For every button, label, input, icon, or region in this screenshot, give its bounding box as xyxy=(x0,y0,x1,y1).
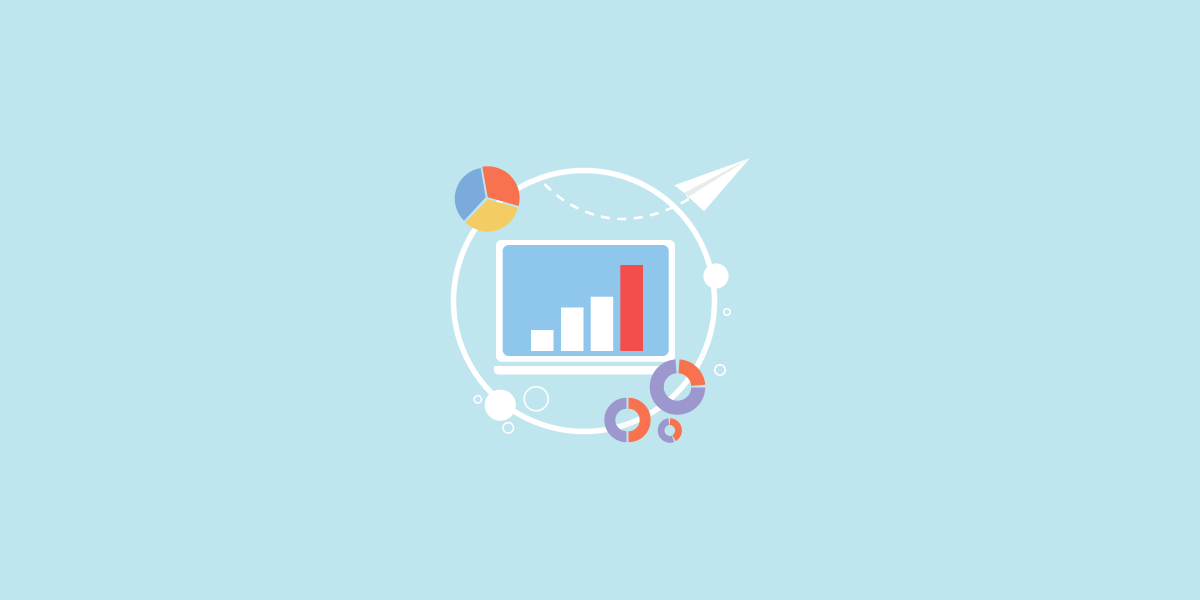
donut chart: medium xyxy=(610,403,645,437)
bar chart xyxy=(531,265,643,351)
laptop lid xyxy=(496,240,675,362)
node: right large dot xyxy=(703,263,729,289)
donut chart: small xyxy=(661,422,679,439)
laptop screen xyxy=(503,245,669,356)
pie slice: blue xyxy=(455,168,486,221)
pie slice: yellow xyxy=(465,199,518,232)
orbit ring xyxy=(454,170,714,432)
laptop xyxy=(494,240,675,374)
bubbles: small rings xyxy=(474,309,730,433)
dashed flight path xyxy=(544,184,689,219)
pie slice: orange xyxy=(482,166,520,206)
laptop base xyxy=(494,366,672,374)
icon: paper plane xyxy=(674,158,750,211)
node: left large dot xyxy=(485,390,516,421)
pie chart xyxy=(455,166,520,232)
donut chart: large xyxy=(657,366,698,408)
